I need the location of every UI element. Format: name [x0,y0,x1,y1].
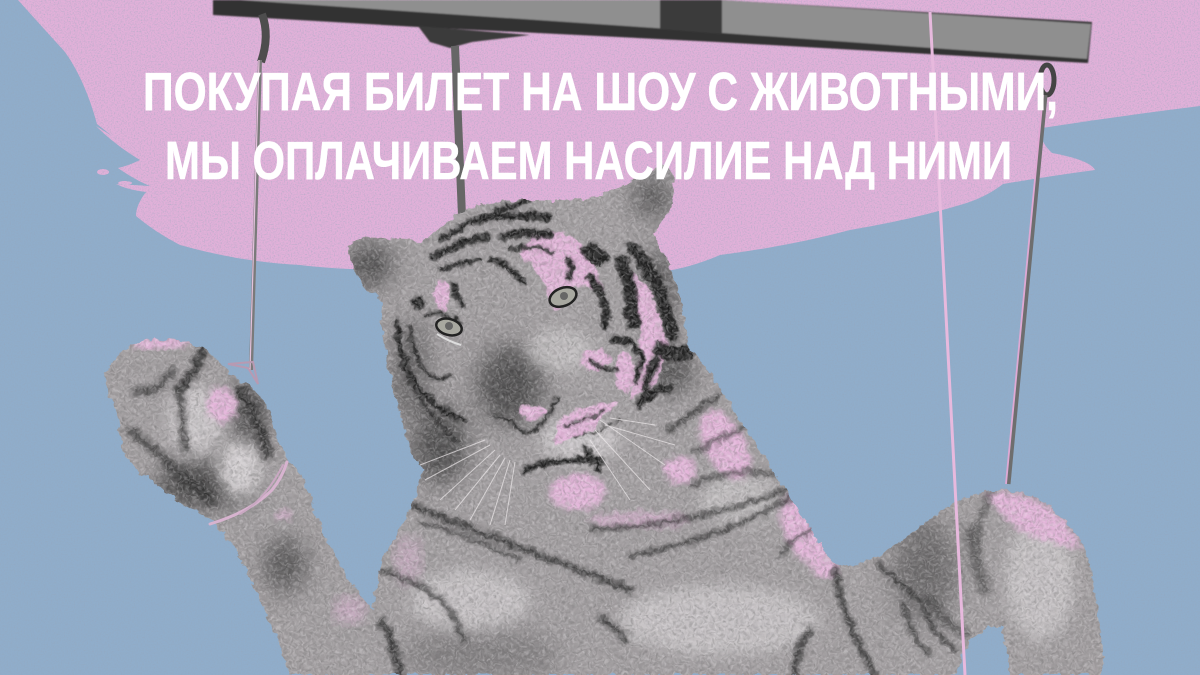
headline [143,62,1058,191]
central rod [455,46,462,216]
wooden control bar [213,0,1092,63]
right string with ring [1006,65,1054,484]
tiger fur grain [90,160,1110,675]
paw string loop and wrist ties [210,362,287,524]
pink brush blob [18,0,1200,272]
tiger shading [155,177,1075,675]
tiger face stripes [397,202,687,470]
splash dots [97,169,132,185]
tiger paw toes [130,345,268,500]
tiger [104,164,1105,675]
tiger arm shadow stripes [930,495,990,635]
tiger body stripes [380,395,955,675]
tiger whiskers [420,418,675,525]
left string with knot [250,14,266,370]
pink puppet string [930,12,965,675]
tiger pink highlights [130,232,1082,624]
tiger eyes [434,283,579,345]
